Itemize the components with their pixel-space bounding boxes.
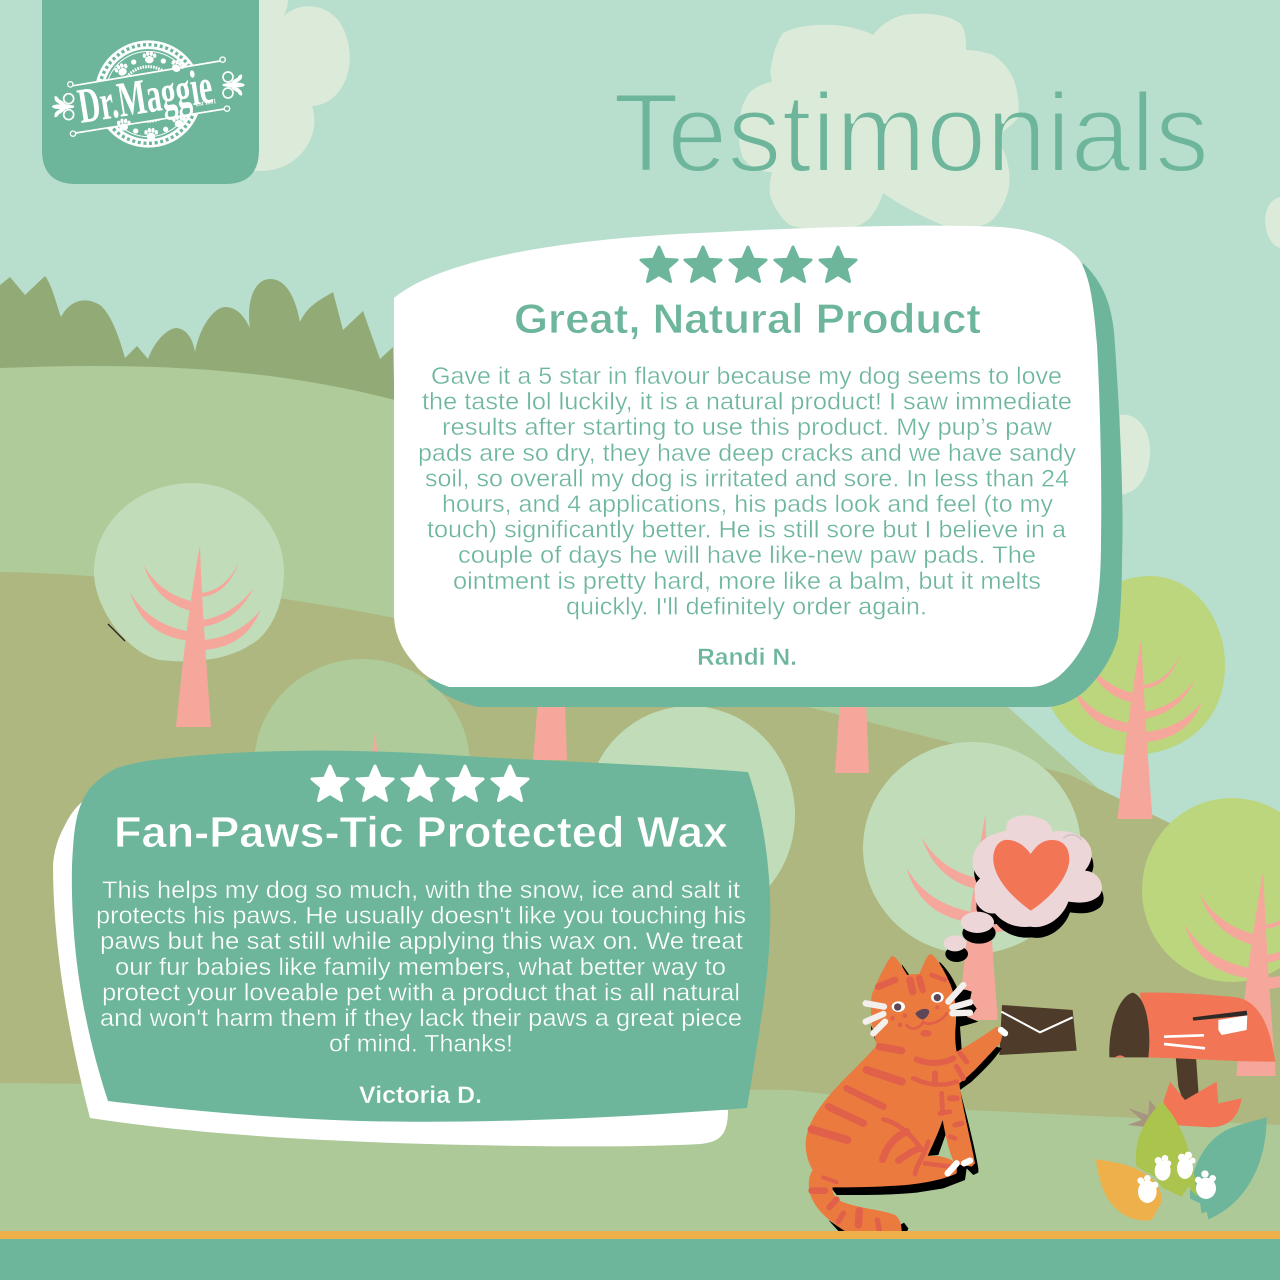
review text: hours, and 4 applications, his pads look and feel (to my <box>442 491 1054 518</box>
review text: pads are so dry, they have deep cracks and we have sandy <box>418 440 1077 467</box>
cat stripes <box>812 975 967 1230</box>
review text: our fur babies like family members, what better way to <box>115 954 726 981</box>
footer green band <box>0 1239 1280 1280</box>
review text: and won't harm them if they lack their paws a great piece <box>100 1005 742 1032</box>
tree: centre left <box>254 659 470 871</box>
clouds <box>250 0 1280 495</box>
star rating <box>312 766 528 800</box>
card heading: Great, Natural Product <box>514 295 981 342</box>
logo mark: Est 1991 <box>195 98 217 108</box>
review text: quickly. I'll definitely order again. <box>566 593 927 620</box>
title: Testimonials <box>613 70 1209 196</box>
star rating <box>641 247 856 282</box>
cat black outline <box>828 962 1002 1231</box>
olive hill <box>0 572 1280 1125</box>
panel: testimonial Victoria <box>53 751 770 1146</box>
logo badge <box>42 0 259 184</box>
icon: plant leaves with paw prints <box>1096 1082 1267 1221</box>
forest treeline <box>0 276 395 420</box>
tree: far right <box>1142 798 1280 1076</box>
logo mark <box>52 45 245 143</box>
review text: Gave it a 5 star in flavour because my dog seems to love <box>431 363 1062 390</box>
card heading: Fan-Paws-Tic Protected Wax <box>114 808 729 857</box>
illustration: thought bubble, envelope, mailbox and plant <box>944 815 1275 1221</box>
icon: envelope <box>999 1005 1077 1055</box>
review text: of mind. Thanks! <box>329 1031 513 1058</box>
review text: protects his paws. He usually doesn't like you touching his <box>96 903 746 930</box>
front meadow <box>0 1083 1280 1235</box>
tree: top left <box>94 483 284 727</box>
card surface <box>394 226 1101 687</box>
cat body <box>806 954 1002 1231</box>
card shadow <box>53 801 728 1146</box>
reviewer name: Randi N. <box>697 644 797 671</box>
card surface <box>72 751 770 1122</box>
light green hill <box>0 366 1280 1130</box>
review text: the taste lol luckily, it is a natural product! I saw immediate <box>422 389 1072 416</box>
title <box>616 88 1204 174</box>
review text: touch) significantly better. He is still sore but I believe in a <box>427 517 1066 544</box>
cat face <box>890 992 944 1037</box>
panel: testimonial Randi <box>394 226 1123 707</box>
tree: centre <box>533 700 795 924</box>
card shadow <box>426 263 1123 707</box>
review text: This helps my dog so much, with the snow, ice and salt it <box>102 877 740 904</box>
tree: lower middle <box>863 742 1081 1020</box>
tree trunk: behind card <box>835 700 869 773</box>
review text: ointment is pretty hard, more like a balm, but it melts <box>453 568 1041 595</box>
review text: paws but he sat still while applying this wax on. We treat <box>100 928 743 955</box>
tree: right of card <box>1045 576 1225 819</box>
review text: couple of days he will have like-new paw pads. The <box>458 542 1036 569</box>
icon: thought bubble with heart <box>944 815 1104 962</box>
icon: mailbox <box>1109 992 1275 1107</box>
review text <box>96 877 746 1058</box>
footer orange stripe <box>0 1231 1280 1239</box>
review text: results after starting to use this product. My pup’s paw <box>442 414 1052 441</box>
reviewer name: Victoria D. <box>359 1082 482 1109</box>
cat whiskers and claws <box>866 985 1005 1173</box>
review text: protect your loveable pet with a product that is all natural <box>102 979 740 1006</box>
review text <box>418 363 1077 620</box>
review text: soil, so overall my dog is irritated and sore. In less than 24 <box>425 465 1069 492</box>
icon: cat <box>806 954 1005 1231</box>
logo mark: Dr.Maggie <box>74 57 216 134</box>
title: Testimonials <box>613 70 1209 196</box>
